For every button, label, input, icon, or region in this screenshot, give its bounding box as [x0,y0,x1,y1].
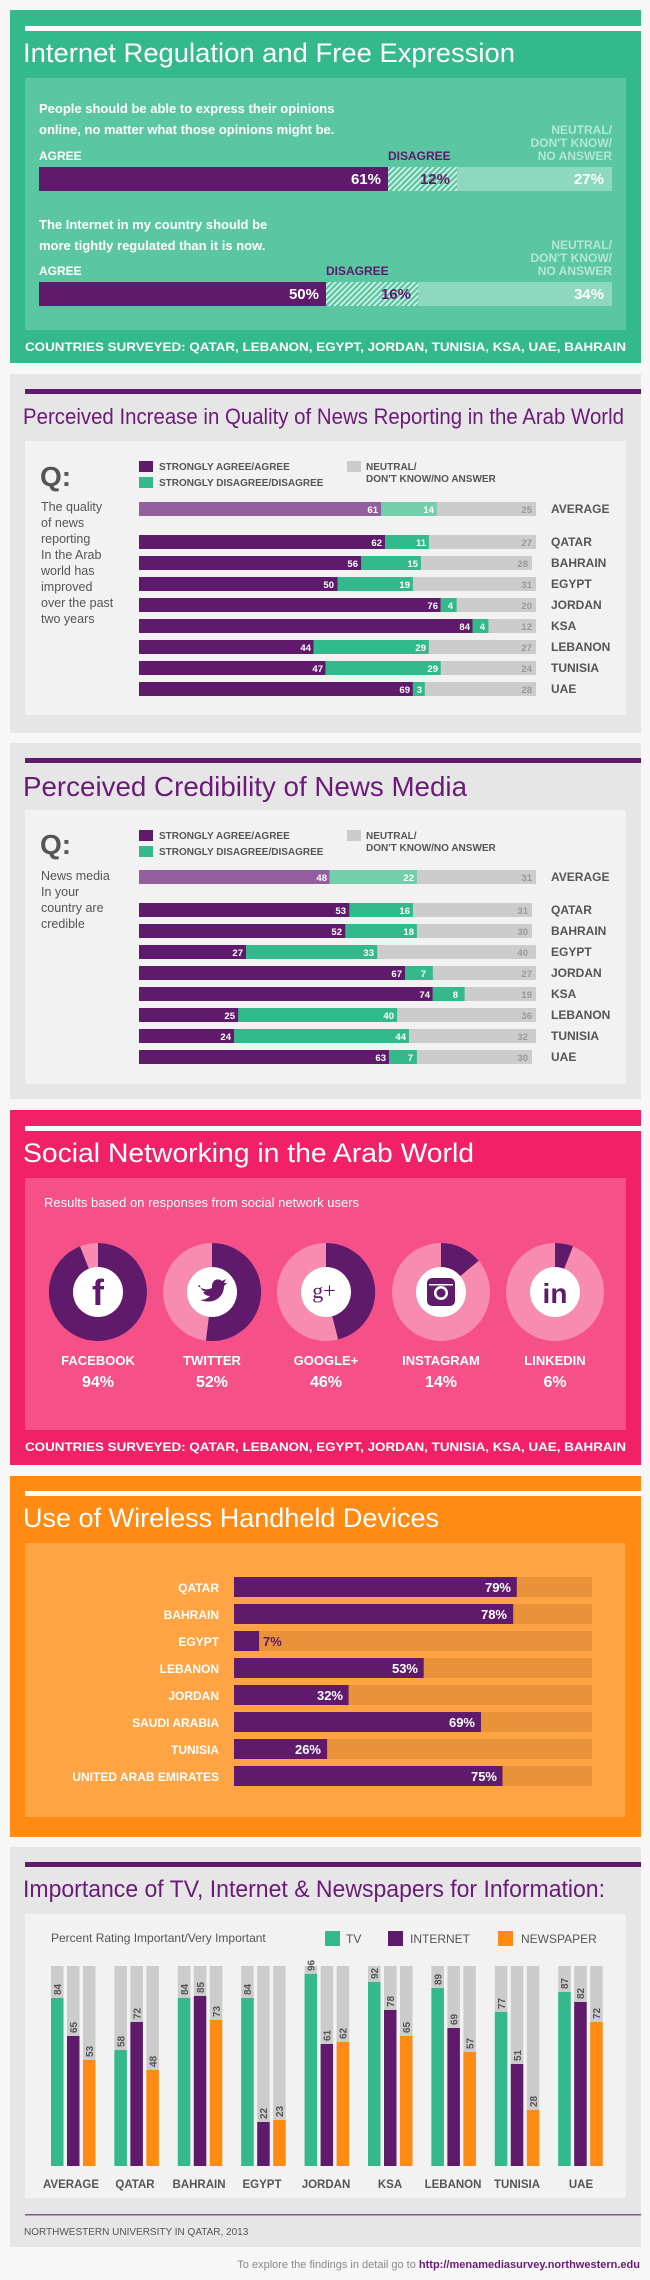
bar: question 1: 61% [351,171,381,188]
chart: wireless bars: UNITED ARAB EMIRATES [72,1770,219,1784]
legend: DON'T KNOW/NO ANSWER [366,843,497,854]
pie: facebook: f [92,1272,105,1313]
pie: facebook [49,1243,147,1391]
columns: 48 [148,2055,159,2067]
pie: instagram [392,1243,490,1391]
bars: EGYPT [551,945,592,959]
bars: 12 [521,622,532,633]
question 1 text: online, no matter what those opinions might be. [39,122,334,137]
footer source: NORTHWESTERN UNIVERSITY IN QATAR, 2013 [24,2227,249,2238]
bars: 28 [517,559,528,570]
chart: wireless bars: BAHRAIN [164,1608,219,1622]
BAHRAIN g=177.8 [178,1966,190,2166]
bars: EGYPT [551,577,592,591]
bars: UAE [551,1050,576,1064]
columns: QATAR [115,2179,155,2191]
bars: 47 [312,664,323,675]
bars: 19 [399,580,410,591]
question text: country are [41,901,104,915]
bar: question 1: 27% [574,171,604,188]
bars: BAHRAIN [551,924,606,938]
columns: 58 [116,2035,127,2047]
bars: UAE [551,682,576,696]
chart: credibility bars [25,810,626,1084]
question 2 labels: NEUTRAL/ [551,238,613,252]
bars: 44 [395,1032,407,1043]
columns: 65 [402,2021,413,2033]
chart: importance columns [25,1914,626,2198]
question 1 labels: NO ANSWER [538,149,612,163]
bars: AVERAGE [551,502,609,516]
bars: 18 [403,927,414,938]
bars: 25 [521,505,533,516]
title: importance: Importance of TV, Internet & Newspapers for Information: [23,1876,605,1903]
pie: linkedin: LINKEDIN [524,1353,586,1368]
columns: 85 [196,1981,207,1993]
question text: over the past [41,596,114,610]
chart: wireless bars: 78% [481,1607,507,1622]
legend: STRONGLY AGREE/AGREE [159,462,290,473]
pie: instagram: 14% [425,1374,457,1391]
columns: 92 [370,1967,381,1979]
columns: 77 [497,1997,508,2009]
pie: twitter: 52% [196,1374,228,1391]
title: internet regulation: Internet Regulation and Free Expression [23,38,515,68]
question 1 labels: NEUTRAL/ [551,123,613,137]
pie: google+ [277,1243,375,1391]
columns: 28 [529,2095,540,2107]
chart: wireless bars [25,1543,625,1817]
bars: 7 [421,969,426,980]
columns: 78 [386,1995,397,2007]
bars: TUNISIA [551,1029,599,1043]
bars: 27 [521,643,532,654]
question 1 text: People should be able to express their opinions [39,101,334,116]
pie: twitter [163,1243,261,1391]
panel: wireless handheld devices [10,1476,641,1837]
KSA g=368 [368,1966,380,2166]
question text: of news [41,516,84,530]
bars: 31 [521,873,533,884]
columns: KSA [378,2179,402,2191]
columns: 89 [433,1973,444,1985]
columns: 73 [212,2005,223,2017]
question text: world has [40,564,94,578]
bars: 27 [521,969,532,980]
columns: 82 [576,1987,587,1999]
bars: 31 [521,580,533,591]
bars: 48 [316,873,327,884]
bars [139,870,610,1064]
columns: 87 [560,1977,571,1989]
bars: 67 [391,969,402,980]
columns: 65 [69,2021,80,2033]
question text: credible [41,917,85,931]
bars: 24 [521,664,533,675]
question text: In your [41,885,79,899]
EGYPT g=241.2 [241,1966,254,2166]
question 1 labels: DISAGREE [388,149,451,163]
legend [139,461,497,489]
columns: 96 [307,1959,318,1971]
bars: 29 [427,664,438,675]
pie: facebook: FACEBOOK [61,1353,135,1368]
chart: wireless bars: SAUDI ARABIA [132,1716,219,1730]
columns: 84 [53,1983,64,1995]
bars [139,502,610,696]
columns: 22 [259,2107,270,2119]
legend: STRONGLY DISAGREE/DISAGREE [159,478,324,489]
pie: facebook: 94% [82,1374,114,1391]
question 2 labels: AGREE [39,264,82,278]
bars: KSA [551,987,577,1001]
question text: improved [41,580,92,594]
legend: STRONGLY AGREE/AGREE [159,831,290,842]
chart: wireless bars: 32% [317,1688,343,1703]
legend [139,830,497,858]
subtitle: Results based on responses from social network users [44,1195,360,1210]
legend [51,1931,597,1946]
bars: 53 [335,906,346,917]
legend: NEWSPAPER [521,1932,597,1946]
columns: BAHRAIN [172,2179,226,2191]
bars: 28 [521,685,532,696]
columns: TUNISIA [494,2179,540,2191]
question 2 labels: DISAGREE [326,264,389,278]
legend: STRONGLY DISAGREE/DISAGREE [159,847,324,858]
legend: NEUTRAL/ [366,831,417,842]
bars: TUNISIA [551,661,599,675]
question text: In the Arab [41,548,102,562]
bars: 27 [521,538,532,549]
columns: 23 [275,2105,286,2117]
panel: internet regulation [10,10,641,363]
bars: 8 [453,990,458,1001]
title: wireless devices: Use of Wireless Handheld Devices [23,1503,439,1533]
bars: 4 [448,601,454,612]
columns: 57 [465,2037,476,2049]
chart: wireless bars: EGYPT [178,1635,220,1649]
question text: reporting [41,532,90,546]
question 2 text: The Internet in my country should be [39,217,267,232]
bars: JORDAN [551,966,602,980]
title: credibility: Perceived Credibility of News Media [23,771,467,802]
legend: INTERNET [410,1932,471,1946]
bars: 61 [367,505,379,516]
panel: credibility of news media [10,743,641,1099]
chart: wireless bars: 7% [263,1634,282,1649]
bars: LEBANON [551,1008,610,1022]
columns: AVERAGE [43,2179,99,2191]
bars: 4 [480,622,486,633]
chart: wireless bars: 69% [449,1715,475,1730]
chart: wireless bars: 26% [295,1742,321,1757]
pie: instagram: INSTAGRAM [402,1353,480,1368]
bars: 11 [416,538,427,549]
question text: News media [41,869,110,883]
bars: KSA [551,619,577,633]
bars: JORDAN [551,598,602,612]
bar: question 2: 50% [289,286,319,303]
columns: UAE [569,2179,593,2191]
bars: 16 [399,906,410,917]
question 2 labels: DON'T KNOW/ [530,251,613,265]
question text: The quality [41,500,103,514]
question 2 labels: NO ANSWER [538,264,612,278]
bar: question 1: 12% [420,171,450,188]
pie: google+: GOOGLE+ [294,1353,359,1368]
bars: 31 [517,906,529,917]
bars: 15 [407,559,419,570]
TUNISIA g=494.8 [495,1966,507,2166]
bars: 56 [347,559,358,570]
columns: 62 [339,2027,350,2039]
pie: twitter: TWITTER [183,1353,241,1368]
bar: question 2: 34% [574,286,604,303]
Q label: Q: [40,829,71,860]
bars: 24 [220,1032,232,1043]
pie: google+: 46% [310,1374,342,1391]
legend: TV [346,1932,361,1946]
bar: question 2 [39,282,612,306]
bars: 22 [403,873,414,884]
chart: wireless bars: QATAR [178,1581,219,1595]
columns: 72 [592,2007,603,2019]
bottom link text: To explore the findings in detail go to http://menamediasurvey.northwestern.edu [237,2259,640,2271]
columns: 53 [85,2045,96,2057]
bars: LEBANON [551,640,610,654]
columns: 84 [243,1983,254,1995]
countries surveyed note: COUNTRIES SURVEYED: QATAR, LEBANON, EGYPT, JORDAN, TUNISIA, KSA, UAE, BAHRAIN [25,1440,626,1454]
bars: BAHRAIN [551,556,606,570]
QATAR g=114.4 [114,1966,127,2166]
bars: 30 [517,927,528,938]
bars: 50 [323,580,334,591]
bars: 63 [375,1053,386,1064]
columns [43,1959,603,2191]
legend: NEUTRAL/ [366,462,417,473]
bars: 25 [224,1011,236,1022]
columns: 72 [132,2007,143,2019]
columns: JORDAN [302,2179,350,2191]
bars: 20 [521,601,532,612]
question 1 labels: AGREE [39,149,82,163]
chart: wireless bars: 53% [392,1661,418,1676]
columns: 51 [513,2049,524,2061]
panel: importance of TV, internet, newspapers [10,1847,641,2247]
title: social networking: Social Networking in the Arab World [23,1138,474,1168]
columns: 61 [323,2029,334,2041]
bars: 62 [371,538,382,549]
bars: 33 [363,948,374,959]
bars: 29 [415,643,426,654]
LEBANON g=431.4 [431,1966,444,2166]
panel: quality of news reporting [10,374,641,733]
bars: 36 [521,1011,532,1022]
bars: 27 [232,948,243,959]
bars: 76 [427,601,438,612]
question 1 labels [39,123,613,163]
bars: 14 [423,505,435,516]
countries surveyed note: COUNTRIES SURVEYED: QATAR, LEBANON, EGYPT, JORDAN, TUNISIA, KSA, UAE, BAHRAIN [25,340,626,354]
pie: google+: g+ [312,1278,336,1303]
AVERAGE g=51 [51,1966,64,2166]
bars: 19 [521,990,532,1001]
bars: AVERAGE [551,870,609,884]
bars: 3 [417,685,422,696]
bars: 44 [300,643,312,654]
chart: wireless bars: 75% [471,1769,497,1784]
bars: 7 [408,1053,413,1064]
bars: 32 [517,1032,528,1043]
Q label: Q: [40,461,71,492]
bars: 69 [399,685,410,696]
inner panel: survey questions [25,78,626,330]
columns: EGYPT [243,2179,281,2191]
columns: LEBANON [425,2179,481,2191]
pie: linkedin: 6% [543,1374,567,1391]
panel: social networking [10,1110,641,1465]
chart: wireless bars: 79% [485,1580,511,1595]
bars: 30 [517,1053,528,1064]
bar: question 2: 16% [381,286,411,303]
inner panel: social charts [25,1178,626,1430]
bars: QATAR [551,903,592,917]
chart: quality bars [25,441,626,715]
bars: 40 [383,1011,394,1022]
question 2 labels [39,238,613,278]
legend: Percent Rating Important/Very Important [51,1931,266,1945]
bar: question 1 [39,167,612,191]
chart: wireless bars: LEBANON [160,1662,219,1676]
pie: linkedin [506,1243,604,1391]
bars: 52 [331,927,342,938]
question 1 labels: DON'T KNOW/ [530,136,613,150]
legend: DON'T KNOW/NO ANSWER [366,474,497,485]
question text: two years [41,612,94,626]
UAE g=558.2 [558,1966,571,2166]
JORDAN g=304.6 [305,1966,317,2166]
chart: wireless bars: TUNISIA [171,1743,219,1757]
columns: 69 [449,2013,460,2025]
bars: QATAR [551,535,592,549]
bars: 84 [459,622,471,633]
columns: 84 [180,1983,191,1995]
question 2 text: more tightly regulated than it is now. [39,238,265,253]
chart: wireless bars: JORDAN [168,1689,219,1703]
pie: linkedin: in [543,1278,567,1309]
bars: 74 [419,990,431,1001]
bars: 40 [517,948,528,959]
